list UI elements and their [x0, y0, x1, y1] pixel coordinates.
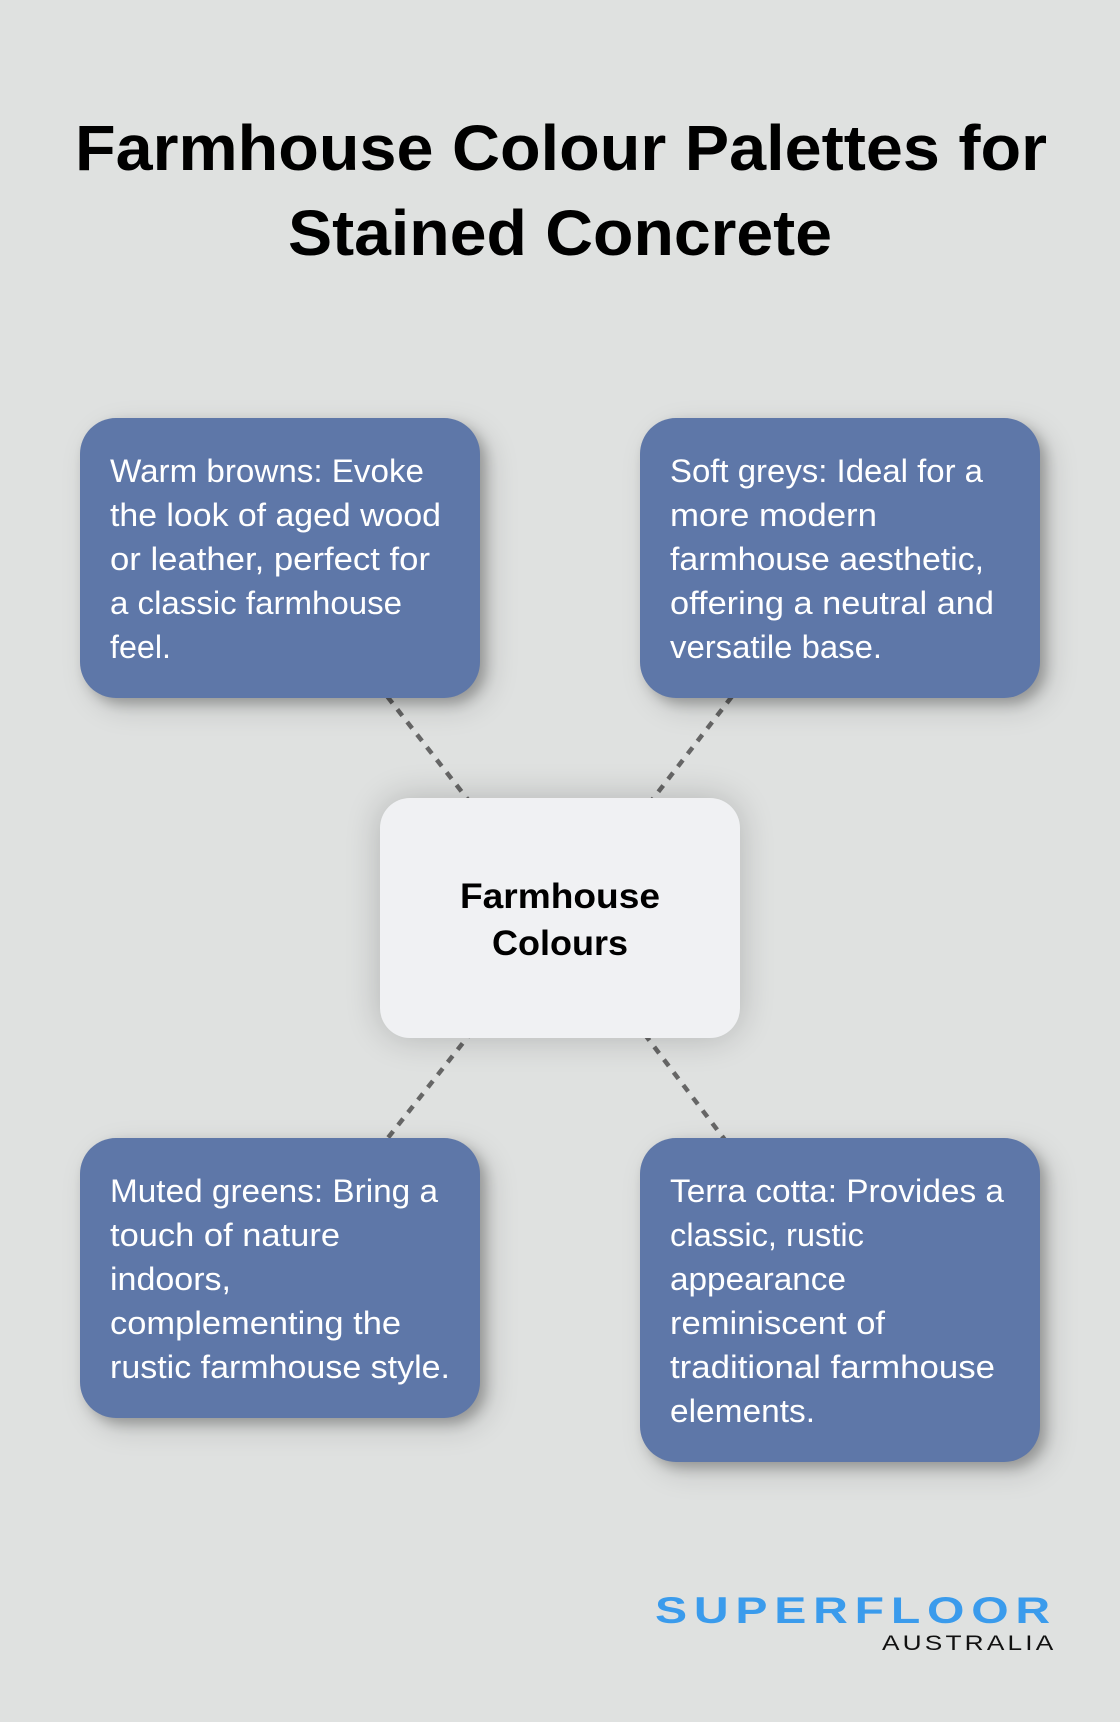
text: soft greys: farmhouse aesthetic, [670, 541, 984, 577]
panel: centre node [380, 798, 740, 1038]
text: terra cotta: elements. [670, 1393, 815, 1429]
centre label: Colours [492, 924, 628, 963]
text: terra cotta: reminiscent of [670, 1305, 885, 1341]
text: warm browns: feel. [110, 629, 171, 665]
text: terra cotta [670, 1173, 1004, 1429]
panel: warm browns [80, 418, 480, 698]
text: terra cotta: classic, rustic [670, 1217, 864, 1253]
text: muted greens: Muted greens: Bring a [110, 1173, 438, 1209]
text: soft greys: versatile base. [670, 629, 882, 665]
logo: Superfloor Australia: SUPERFLOOR [655, 1590, 1050, 1632]
text: muted greens: touch of nature [110, 1217, 340, 1253]
panel: terra cotta [640, 1138, 1040, 1462]
text: soft greys: more modern [670, 497, 877, 533]
text: warm browns: the look of aged wood [110, 497, 441, 533]
title: Farmhouse Colour Palettes for [75, 112, 1047, 184]
panel: soft greys [640, 418, 1040, 698]
text: muted greens [110, 1173, 450, 1385]
text: warm browns: or leather, perfect for [110, 541, 430, 577]
text: muted greens: rustic farmhouse style. [110, 1349, 450, 1385]
text: terra cotta: Terra cotta: Provides a [670, 1173, 1004, 1209]
logo: Superfloor Australia: AUSTRALIA [882, 1631, 1053, 1655]
text: warm browns: Warm browns: Evoke [110, 453, 424, 489]
centre label [460, 877, 660, 963]
logo: Superfloor Australia [655, 1590, 1054, 1655]
centre label: Farmhouse [460, 877, 660, 916]
text: soft greys: Soft greys: Ideal for a [670, 453, 983, 489]
text: soft greys [670, 453, 994, 665]
text: terra cotta: traditional farmhouse [670, 1349, 995, 1385]
text: terra cotta: appearance [670, 1261, 846, 1297]
title [75, 112, 1047, 269]
text: warm browns [110, 453, 441, 665]
panel: muted greens [80, 1138, 480, 1418]
text: soft greys: offering a neutral and [670, 585, 994, 621]
text: warm browns: a classic farmhouse [110, 585, 402, 621]
text: muted greens: indoors, [110, 1261, 231, 1297]
text: muted greens: complementing the [110, 1305, 401, 1341]
title: Stained Concrete [288, 197, 832, 269]
